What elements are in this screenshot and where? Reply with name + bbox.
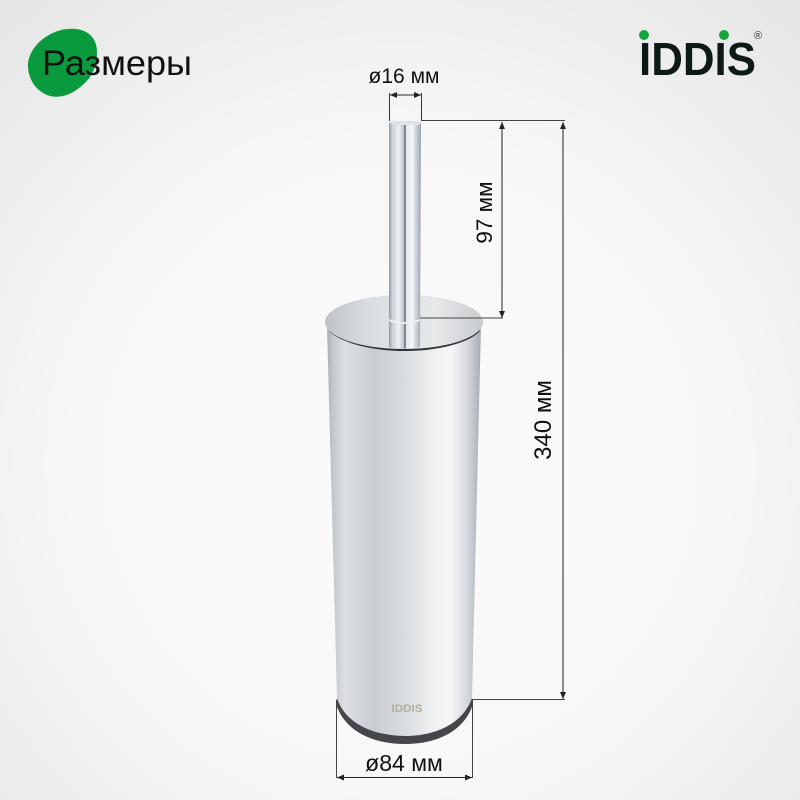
logo: IDDIS [639,30,762,85]
handle collar [389,319,420,324]
extension lines [336,700,472,778]
icon: green blob [28,29,97,97]
dimension text: 97 мм [472,181,497,244]
lid [325,295,483,349]
lid dark rim [327,323,482,351]
base rubber ring [336,698,473,744]
arrow [501,122,503,318]
body logo: IDDIS [392,703,422,715]
arrow [390,94,421,96]
dimension text: 340 мм [530,380,557,460]
logo wordmark: IDDIS [639,33,756,85]
extension lines [390,93,422,121]
body cylinder [327,326,481,740]
heading text: Размеры [42,44,192,83]
dimension text: ø16 мм [369,65,439,88]
handle [389,121,421,348]
extension lines [420,120,565,318]
dimension text: ø84 мм [365,750,443,776]
logo dot right [719,30,729,40]
dimension: handle diameter [369,65,439,121]
dimension: base diameter 84 mm [336,700,472,778]
arrow [337,776,472,778]
heading: Размеры with green blob [28,29,192,97]
logo registered mark: ® [754,30,762,42]
product: toilet brush holder [325,121,483,744]
handle top highlight [391,121,420,125]
logo dot left [639,30,649,40]
dimension: handle height 97 mm [420,120,565,318]
extension line [472,698,565,700]
arrow [562,122,564,699]
